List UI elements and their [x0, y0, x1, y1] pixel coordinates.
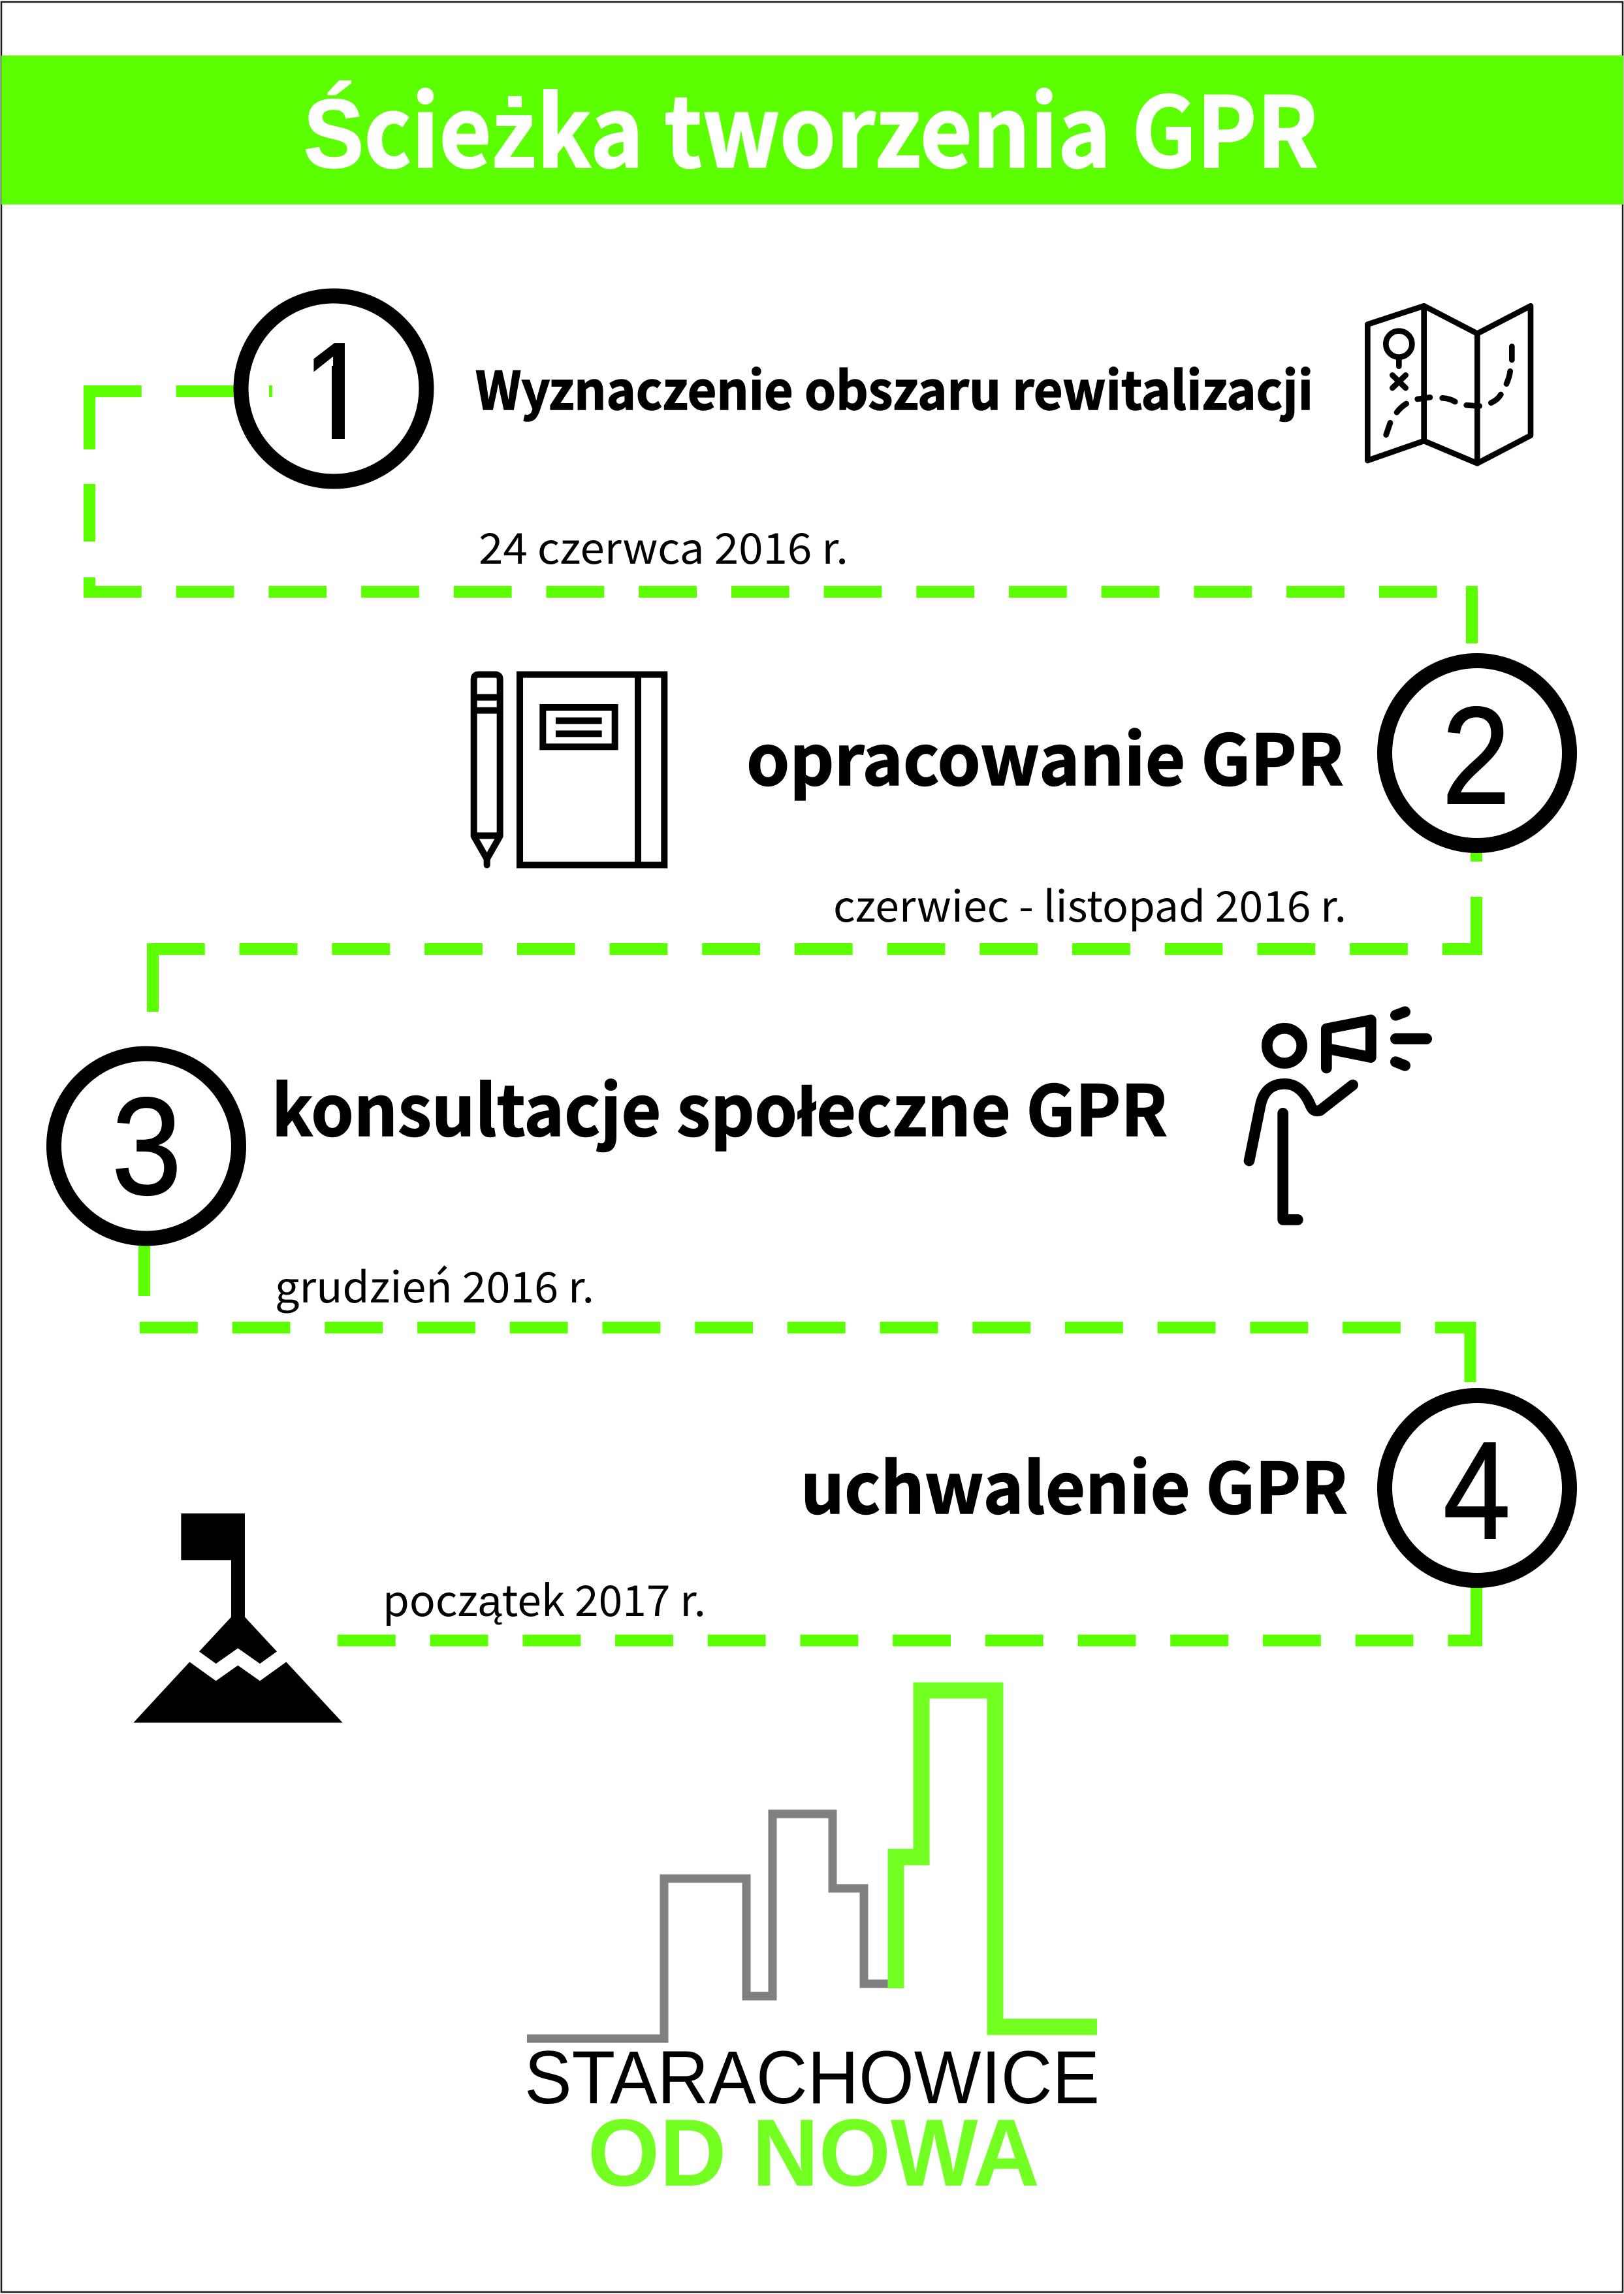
number badge 4	[1384, 1395, 1570, 1581]
date: step 1: 24 czerwca 2016 r.	[479, 515, 848, 576]
step 4	[133, 1395, 1570, 1722]
heading: step 4: uchwalenie GPR	[801, 1432, 1348, 1534]
number badge 2: 2	[1442, 678, 1510, 833]
logo tagline: OD NOWA	[588, 2099, 1040, 2206]
icon: person with megaphone	[1249, 1012, 1427, 1220]
heading: step 2: opracowanie GPR	[746, 704, 1344, 805]
number badge 2	[1384, 661, 1570, 845]
logo wordmark: STARACHOWICE	[524, 2036, 1100, 2120]
title banner	[1, 55, 1623, 204]
icon: flag on mountain	[133, 1513, 343, 1722]
number badge 1: 1	[302, 314, 372, 468]
logo skyline	[527, 1690, 1097, 2039]
heading: step 3: konsultacje społeczne GPR	[272, 1055, 1168, 1156]
date: step 4: początek 2017 r.	[383, 1567, 706, 1628]
number badge 3	[54, 1054, 239, 1238]
icon: folded map	[1367, 306, 1531, 463]
number badge 3: 3	[112, 1069, 182, 1223]
icon: pencil and notebook	[474, 675, 664, 865]
step 3	[54, 1012, 1427, 1315]
title: Ścieżka tworzenia GPR	[304, 55, 1318, 196]
number badge 1	[241, 296, 426, 481]
number badge 4: 4	[1443, 1414, 1510, 1568]
step 1	[241, 296, 1531, 576]
logo: Starachowice od nowa	[524, 1690, 1100, 2206]
step 2	[474, 661, 1570, 934]
heading: step 1: Wyznaczenie obszaru rewitalizacji	[475, 349, 1313, 425]
dashed path connecting the steps	[84, 385, 1482, 1646]
date: step 2: czerwiec - listopad 2016 r.	[833, 873, 1346, 934]
date: step 3: grudzień 2016 r.	[275, 1253, 594, 1315]
